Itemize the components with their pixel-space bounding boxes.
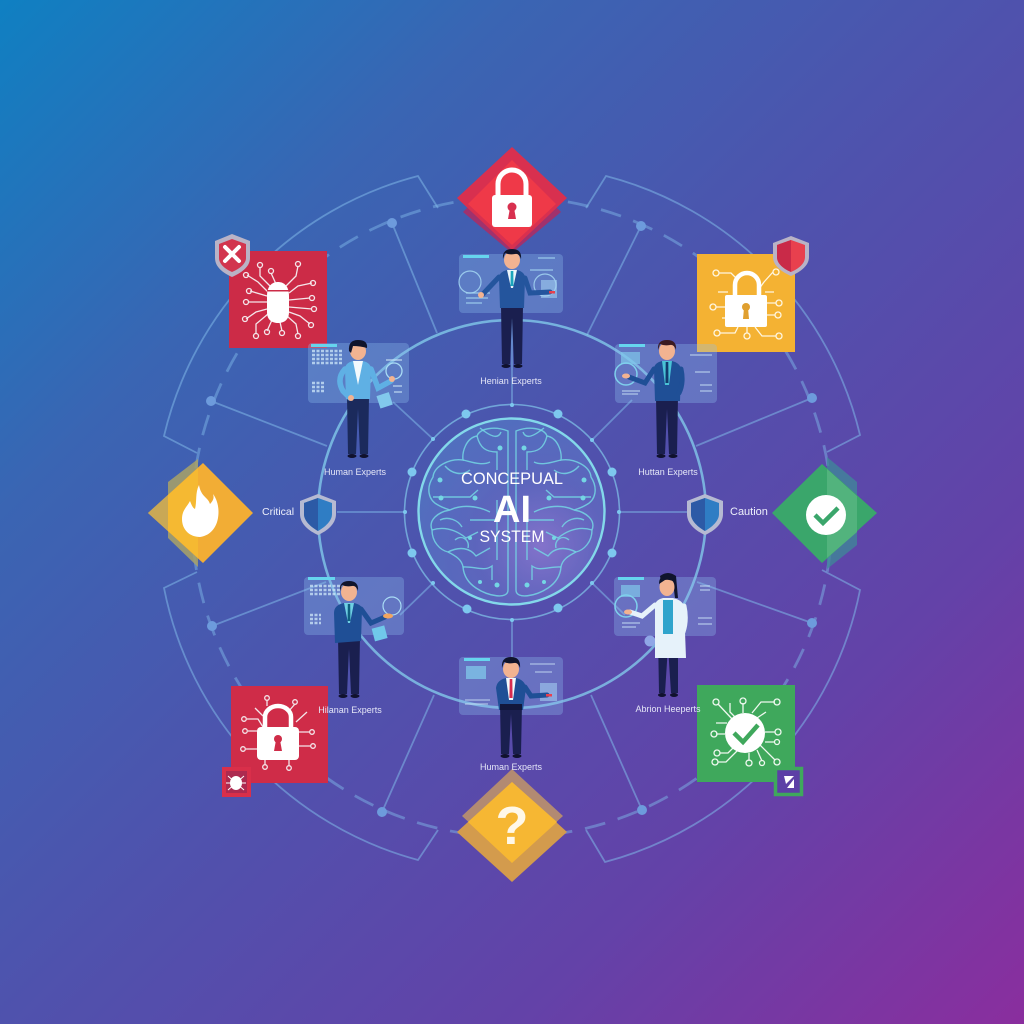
panel: top expert [459, 249, 563, 368]
icon: red lock circuit square [231, 686, 328, 783]
panel: lower-right expert [614, 573, 716, 697]
icon: red shield [773, 236, 809, 276]
icon: yellow question diamond: ? [496, 796, 528, 856]
icon: yellow lock circuit square [697, 254, 795, 352]
panel: upper-left expert [308, 340, 409, 458]
label: upper-left expert: Human Experts [324, 467, 387, 477]
icon: green check circuit square [697, 685, 795, 782]
label: lower-right expert: Abrion Heeperts [635, 704, 701, 714]
icon: bug badge [222, 767, 251, 797]
panel: lower-left expert [304, 577, 404, 698]
icon: yellow flame diamond [148, 459, 253, 567]
central AI brain [418, 418, 604, 604]
title: conceptual AI system: CONCEPUAL [461, 469, 563, 488]
figure: expert in lab coat [624, 573, 686, 697]
figure: expert [340, 340, 395, 458]
icon: top red lock diamond [457, 147, 567, 253]
ring nodes [206, 218, 817, 817]
figure: expert [496, 657, 552, 758]
icon: blue shield left [300, 494, 336, 535]
label: critical: Critical [262, 506, 294, 518]
title: conceptual AI system: SYSTEM [480, 527, 544, 546]
icon: yellow question diamond [457, 769, 567, 882]
figure: expert [334, 581, 393, 698]
label: lower-left expert: Hilanan Experts [318, 705, 382, 715]
title: conceptual AI system: AI [493, 489, 531, 531]
figure: expert [622, 340, 682, 458]
outer network rings and spokes [164, 176, 860, 862]
label: upper-right expert: Huttan Experts [638, 467, 698, 477]
icon: blue shield right [687, 494, 723, 535]
panel: upper-right expert [615, 340, 717, 458]
label: caution: Caution [730, 506, 768, 518]
figure: expert [478, 249, 555, 368]
icon: green outlined badge [776, 768, 802, 794]
icon: red bug circuit square [229, 251, 327, 348]
icon: green check diamond [772, 457, 877, 569]
panel: bottom expert [459, 657, 563, 758]
title: conceptual AI system [461, 469, 563, 546]
label: top expert: Henian Experts [480, 376, 542, 386]
label: bottom expert: Human Experts [480, 762, 543, 772]
icon: shield with X [215, 234, 250, 277]
